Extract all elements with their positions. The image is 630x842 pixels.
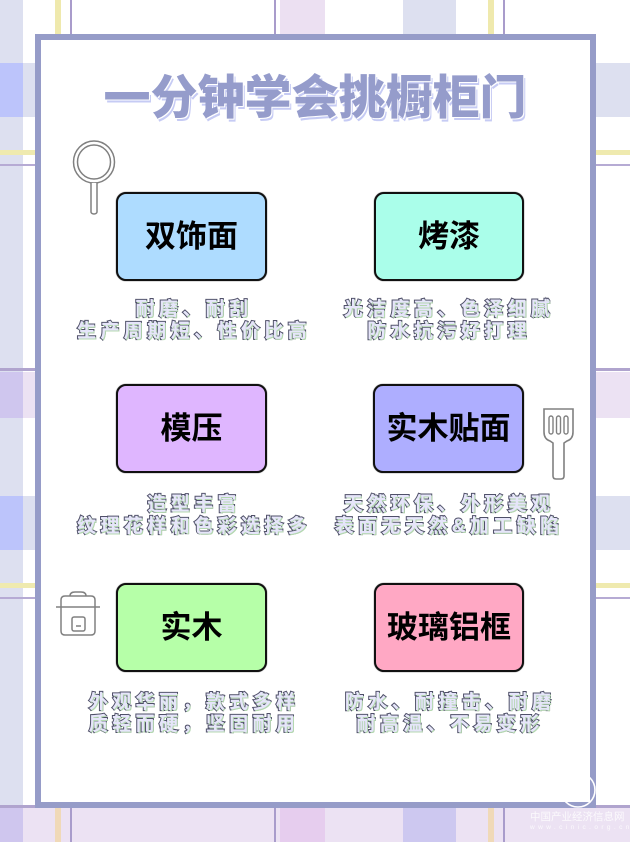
- card: 实木贴面: [373, 384, 524, 473]
- description: 烤漆: [342, 296, 554, 342]
- title: 一分钟学会挑橱柜门: [104, 71, 526, 124]
- watermark text: www.cinic.org.cn: [530, 824, 630, 831]
- card: 实木: [116, 583, 267, 672]
- watermark logo ring: [565, 777, 596, 808]
- description: 模压: 纹理花样和色彩选择多: [77, 516, 311, 537]
- description: 模压: 造型丰富: [147, 494, 241, 515]
- description: 实木: [87, 690, 299, 735]
- description: 玻璃铝框: 防水、耐撞击、耐磨: [345, 692, 555, 713]
- watermark text: [530, 811, 630, 831]
- description: 玻璃铝框: 耐高温、不易变形: [356, 714, 544, 735]
- card: 烤漆: [374, 192, 524, 281]
- card: 双饰面: 双饰面: [145, 219, 238, 254]
- description: 双饰面: [76, 298, 311, 342]
- description: 双饰面: 生产周期短、性价比高: [77, 321, 311, 342]
- card: 模压: 模压: [160, 411, 222, 446]
- description: 烤漆: 防水抗污好打理: [367, 321, 531, 342]
- description: 实木贴面: 表面无天然&加工缺陷: [335, 516, 563, 537]
- description: 实木: 外观华丽，款式多样: [89, 692, 299, 713]
- icon: frying pan: [72, 140, 116, 215]
- card: 玻璃铝框: 玻璃铝框: [387, 610, 511, 645]
- icon: spatula: [543, 408, 574, 480]
- description: 玻璃铝框: [345, 690, 555, 735]
- card: 玻璃铝框: [374, 583, 524, 672]
- card: 烤漆: 烤漆: [418, 219, 480, 254]
- description: 实木贴面: 天然环保、外形美观: [344, 494, 554, 515]
- description: 模压: [76, 492, 311, 537]
- card: 双饰面: [116, 192, 267, 281]
- card: 实木: 实木: [160, 610, 222, 645]
- description: 烤漆: 光洁度高、色泽细腻: [344, 299, 554, 320]
- description: 双饰面: 耐磨、耐刮: [135, 299, 252, 320]
- card: 实木贴面: 实木贴面: [386, 411, 510, 446]
- watermark text: 中国产业经济信息网: [530, 811, 624, 823]
- description: 实木贴面: [333, 492, 563, 537]
- description: 实木: 质轻而硬，坚固耐用: [89, 714, 299, 735]
- icon: rice cooker: [56, 591, 100, 636]
- card: 模压: [116, 384, 267, 473]
